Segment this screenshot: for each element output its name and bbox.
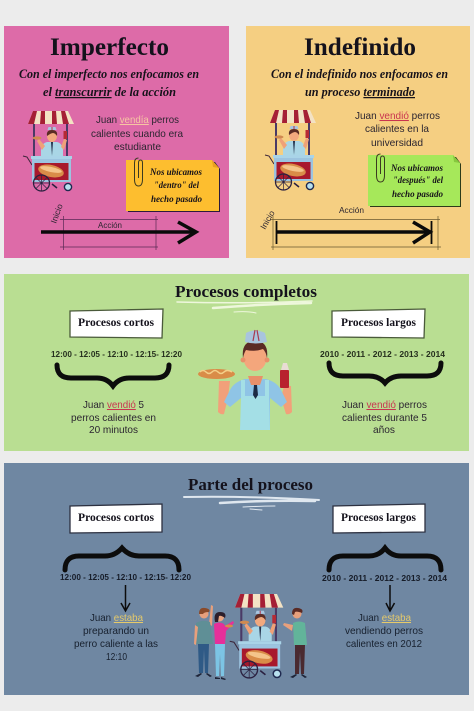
callout: después del hecho pasado: hecho pasado <box>392 190 443 200</box>
icon: customer man right <box>283 608 307 678</box>
heading: imperfecto: Imperfecto <box>50 34 169 61</box>
text block: long example: vendiendo perros <box>345 626 423 637</box>
text block: example: Juan vendía perros <box>96 115 179 126</box>
callout: después del hecho pasado <box>368 154 461 207</box>
text block: short example: 12:10 <box>106 652 127 663</box>
text block: example: universidad <box>371 138 423 149</box>
text block: example: estudiante <box>114 142 161 153</box>
text block: short example: 20 minutos <box>89 425 138 436</box>
icon: brace right <box>329 363 441 383</box>
timeline arrow: imperfecto: Inicio <box>48 202 65 225</box>
arrow: long time <box>386 585 394 611</box>
arrow: short time <box>121 585 130 611</box>
icon: hot dog vendor <box>198 330 292 430</box>
text block: indefinido definition: un proceso terminado <box>305 85 415 99</box>
text block: long example: Juan vendió perros <box>342 400 427 411</box>
callout: dentro del hecho pasado <box>126 158 220 212</box>
icon: hot dog cart <box>265 110 316 190</box>
panel: parte del proceso <box>4 463 469 695</box>
timeline arrow: indefinido: Inicio <box>258 208 277 231</box>
text block: short example: perro caliente a las <box>74 639 158 650</box>
text block: example: Juan vendió perros <box>355 111 440 122</box>
label: procesos largos: Procesos largos <box>341 317 417 329</box>
text block: short example: preparando un <box>83 626 149 637</box>
text block: short example: Juan vendió 5 <box>83 400 144 411</box>
icon: brace right <box>329 548 441 570</box>
icon: brace left <box>65 548 179 570</box>
text block: long example <box>345 613 423 650</box>
timeline arrow: imperfecto: Acción <box>98 220 122 230</box>
text: long years: 2010 - 2011 - 2012 - 2013 - 2014 <box>322 574 448 583</box>
callout: después del hecho pasado: Nos ubicamos <box>390 164 443 174</box>
text block: long example: años <box>373 425 395 436</box>
text block: long example: calientes durante 5 <box>342 413 427 424</box>
text block: example: calientes en la <box>365 124 429 135</box>
panel: imperfecto <box>4 26 229 258</box>
timeline arrow: indefinido <box>258 205 441 250</box>
label: procesos cortos: Procesos cortos <box>78 512 155 524</box>
icon: customer man left <box>194 605 213 677</box>
label: procesos largos: Procesos largos <box>341 512 417 524</box>
timeline arrow: indefinido: Acción <box>339 205 364 215</box>
heading: indefinido: Indefinido <box>304 34 416 61</box>
text: long years: 2010 - 2011 - 2012 - 2013 - 2014 <box>320 350 446 359</box>
brush underline <box>184 497 319 510</box>
text block: short example: Juan estaba <box>90 613 143 624</box>
callout: después del hecho pasado: "después" del <box>393 176 443 186</box>
text block: imperfecto definition: Con el imperfecto nos enfocamos en <box>19 67 199 81</box>
text: short times: 12:00 - 12:05 - 12:10 - 12:15- 12:20 <box>60 573 192 582</box>
text block: example <box>91 115 183 153</box>
brush underline <box>177 301 312 313</box>
text block: example <box>355 111 440 149</box>
heading: procesos completos: Procesos completos <box>175 282 317 301</box>
text block: imperfecto definition <box>19 67 199 99</box>
text block: short example <box>71 400 156 436</box>
callout: dentro del hecho pasado: hecho pasado <box>151 195 202 205</box>
text block: long example: calientes en 2012 <box>346 639 422 650</box>
panel: indefinido <box>246 26 470 258</box>
text block: long example: Juan estaba <box>358 613 411 624</box>
label: procesos largos <box>332 309 425 338</box>
callout: dentro del hecho pasado: Nos ubicamos <box>149 168 202 178</box>
label: procesos cortos: Procesos cortos <box>78 317 155 329</box>
icon: brace left <box>57 365 169 386</box>
text block: indefinido definition: Con el indefinido nos enfocamos en <box>271 67 448 81</box>
text block: long example <box>342 400 427 436</box>
text: short times: 12:00 - 12:05 - 12:10 - 12:15- 12:20 <box>51 350 183 359</box>
icon: hot dog cart <box>23 111 74 191</box>
text block: imperfecto definition: el transcurrir de la acción <box>43 85 176 99</box>
icon: hot dog cart <box>230 594 283 678</box>
callout: dentro del hecho pasado: "dentro" del <box>154 181 199 191</box>
label: procesos largos <box>333 504 425 533</box>
timeline arrow: imperfecto <box>41 202 196 250</box>
text block: short example: perros calientes en <box>71 413 156 424</box>
label: procesos cortos <box>70 504 162 533</box>
icon: customers and cart <box>194 594 307 680</box>
icon: customer woman <box>214 612 234 680</box>
text block: indefinido definition <box>271 67 448 99</box>
label: procesos cortos <box>70 309 163 338</box>
heading: parte del proceso: Parte del proceso <box>188 475 313 494</box>
panel: procesos completos <box>4 274 469 451</box>
text block: short example <box>74 613 158 663</box>
text block: example: calientes cuando era <box>91 129 183 140</box>
